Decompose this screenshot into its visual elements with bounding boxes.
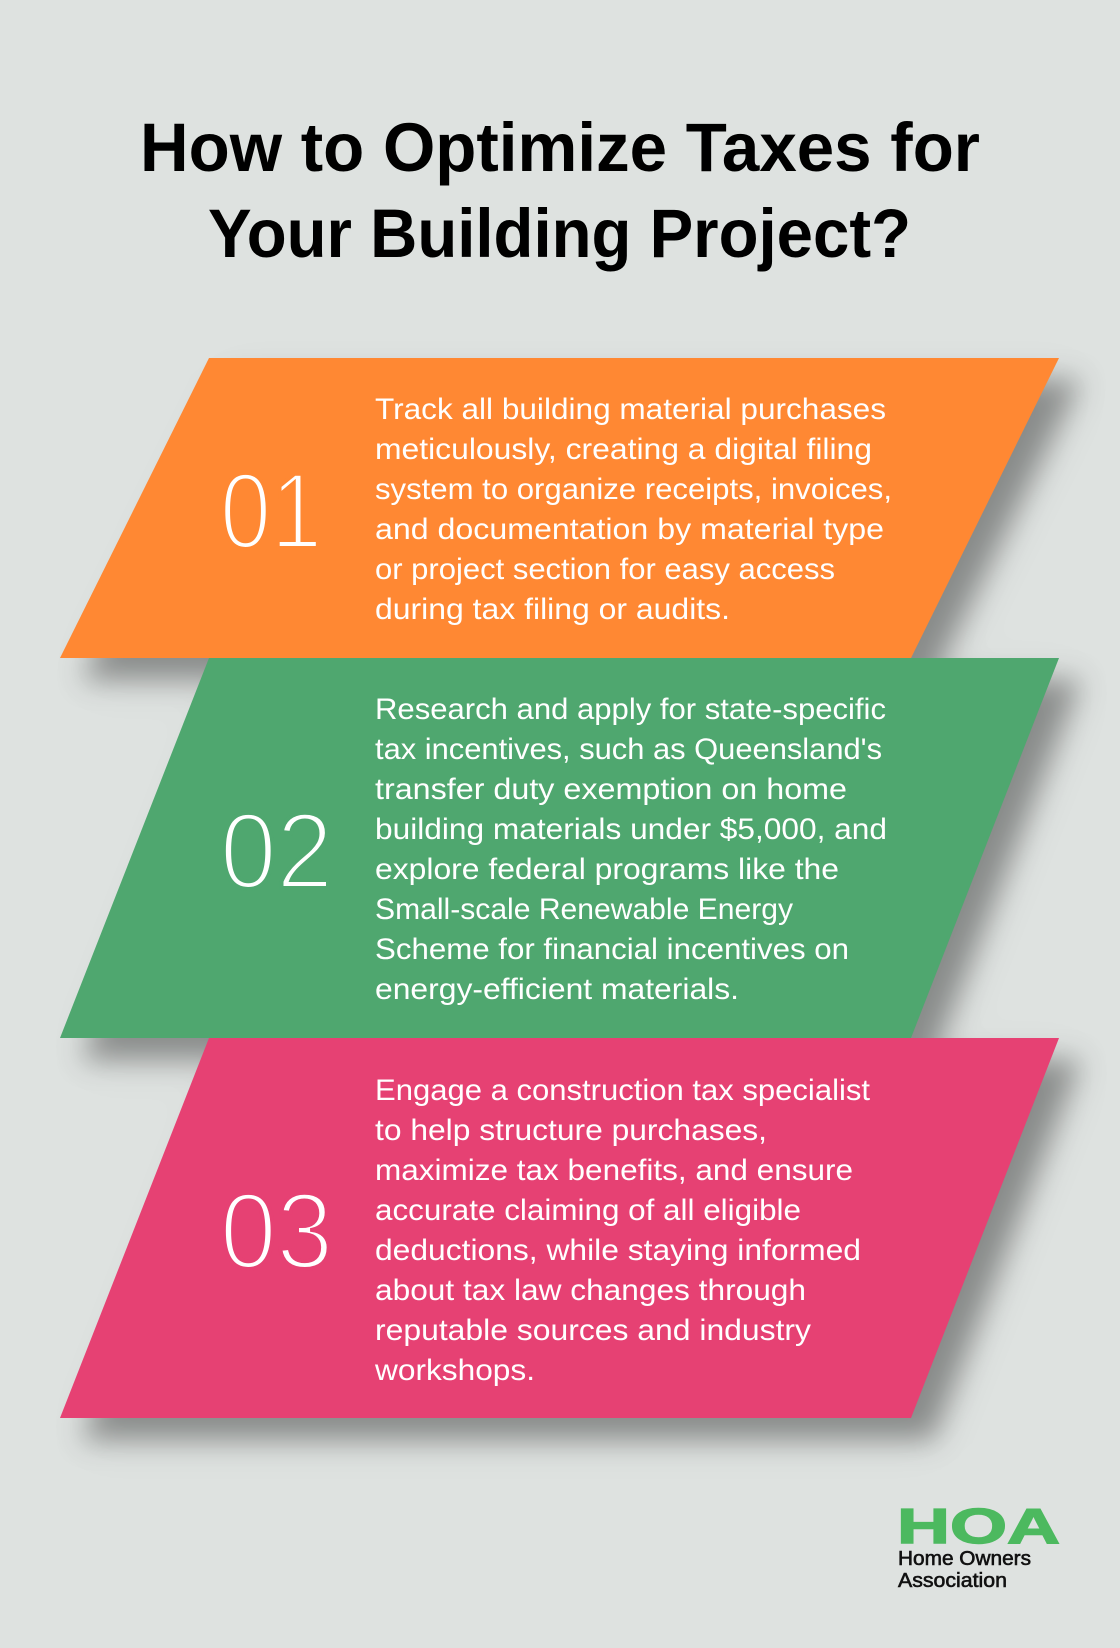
panel: step 01 — [60, 358, 1059, 658]
text block: step 02: Research and apply for state-specific — [375, 693, 886, 726]
text block: step 02: Small-scale Renewable Energy — [375, 893, 793, 926]
text block: step 02: energy-efficient materials. — [375, 973, 739, 1006]
text block: step 03: to help structure purchases, — [375, 1114, 767, 1147]
text block: step 03 — [374, 1074, 871, 1387]
text block: step 01: system to organize receipts, invoices, — [375, 473, 892, 506]
title: How to Optimize Taxes for — [140, 109, 980, 186]
text block: step 01 — [375, 393, 892, 626]
title — [140, 109, 980, 272]
logo: HOA Home Owners Association — [897, 1500, 1060, 1592]
text block: step 01: or project section for easy access — [375, 553, 835, 586]
text block: step 02: building materials under $5,000, and — [375, 813, 887, 846]
text block: step 03: accurate claiming of all eligible — [375, 1194, 801, 1227]
text block: step 03: about tax law changes through — [375, 1274, 806, 1307]
text block: step 01: and documentation by material type — [375, 513, 884, 546]
text block: step 02: Scheme for financial incentives on — [375, 933, 849, 966]
number 02: 02 — [220, 790, 333, 911]
text block: step 03: reputable sources and industry — [375, 1314, 811, 1347]
logo: HOA Home Owners Association: Association — [898, 1570, 1007, 1592]
text block: step 03: workshops. — [374, 1354, 535, 1387]
number 03: 03 — [220, 1170, 333, 1291]
panel: step 02 — [60, 658, 1059, 1038]
number 01: 01 — [220, 450, 322, 571]
text block: step 02 — [375, 693, 887, 1006]
text block: step 01: during tax filing or audits. — [375, 593, 730, 626]
logo: HOA Home Owners Association: HOA — [897, 1500, 1060, 1554]
text block: step 03: deductions, while staying informed — [375, 1234, 861, 1267]
text block: step 03: Engage a construction tax specialist — [375, 1074, 871, 1107]
text block: step 02: transfer duty exemption on home — [375, 773, 847, 806]
title: Your Building Project? — [208, 195, 911, 272]
text block: step 03: maximize tax benefits, and ensure — [375, 1154, 853, 1187]
logo: HOA Home Owners Association: Home Owners — [898, 1548, 1031, 1570]
text block: step 01: meticulously, creating a digital filing — [375, 433, 872, 466]
text block: step 01: Track all building material purchases — [375, 393, 886, 426]
text block: step 02: tax incentives, such as Queensland's — [375, 733, 882, 766]
panel: step 03 — [60, 1038, 1059, 1418]
text block: step 02: explore federal programs like the — [375, 853, 839, 886]
